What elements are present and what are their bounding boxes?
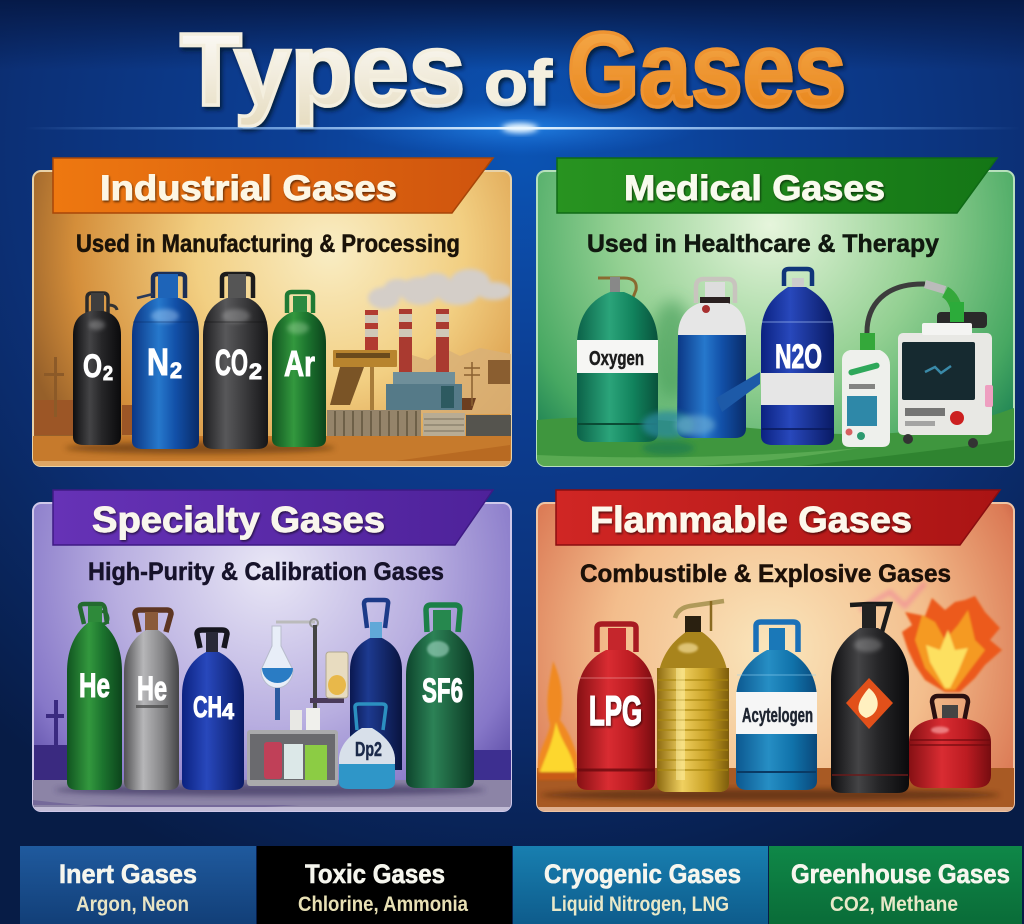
ground — [33, 780, 511, 811]
ground — [537, 408, 1014, 466]
title — [180, 11, 846, 129]
subtitle: industrial: Used in Manufacturing & Processing — [76, 230, 460, 258]
pink scribble — [860, 583, 925, 610]
cylinder He green: He — [79, 667, 110, 705]
cylinder black with hazard — [831, 604, 909, 793]
cylinder N2: 2 — [170, 358, 182, 383]
tile: cryogenic gases — [513, 846, 768, 924]
cylinder He silver — [124, 610, 179, 790]
platform — [330, 367, 364, 405]
title: Gases — [567, 11, 846, 129]
smoke — [368, 269, 512, 309]
patient monitor — [898, 302, 993, 448]
cylinder Acytelogen — [736, 622, 817, 790]
subtitle: medical: Used in Healthcare & Therapy — [587, 230, 939, 258]
tile: greenhouse gases: CO2, Methane — [830, 893, 958, 916]
utility pole — [464, 362, 480, 406]
subtitle: flammable: Combustible & Explosive Gases — [580, 560, 951, 588]
heading ribbon: specialty — [53, 490, 493, 545]
cylinder white-topped blue — [677, 279, 746, 438]
heading ribbon: flammable — [556, 490, 1000, 545]
heading ribbon: flammable: Flammable Gases — [590, 499, 912, 540]
big flame — [902, 596, 1002, 692]
cylinder LPG — [577, 624, 655, 790]
panel: flammable gases — [537, 503, 1014, 811]
cylinder CO2: 2 — [249, 359, 262, 384]
handheld device and hose — [842, 284, 958, 447]
lab apparatus — [247, 619, 348, 786]
tile: cryogenic gases: Cryogenic Gases — [544, 859, 741, 889]
plant — [393, 372, 455, 385]
cylinder CO2 — [203, 274, 268, 449]
cylinder SF6: SF6 — [422, 672, 463, 710]
cylinder LPG: LPG — [589, 687, 642, 734]
title: Types — [180, 12, 465, 127]
cylinder CH4: 4 — [222, 699, 235, 724]
tile: greenhouse gases — [769, 846, 1022, 924]
cylinder Oxygen: Oxygen — [589, 348, 644, 370]
subtitle: specialty: High-Purity & Calibration Gases — [88, 558, 444, 586]
title: of — [484, 47, 553, 119]
tile: toxic gases — [257, 846, 512, 924]
tile: inert gases: Argon, Neon — [76, 893, 189, 916]
cylinder Ar: Ar — [284, 343, 315, 384]
heading ribbon: medical: Medical Gases — [624, 169, 885, 208]
cylinder O2: 2 — [103, 363, 113, 385]
left flame — [538, 661, 577, 780]
cylinder N2O — [761, 269, 834, 445]
heading ribbon: medical — [557, 158, 997, 213]
panel: industrial gases — [33, 171, 512, 466]
panel: specialty gases — [33, 503, 511, 811]
cylinder O2 — [73, 293, 121, 445]
cylinder He green — [67, 604, 122, 790]
cylinder Acytelogen: Acytelogen — [742, 705, 813, 727]
heading ribbon: industrial — [53, 158, 493, 213]
factory scene — [34, 269, 512, 437]
cylinder Oxygen — [577, 277, 658, 442]
skyline — [34, 745, 67, 780]
hose spray between cylinders — [642, 372, 760, 455]
glowing divider — [25, 100, 1020, 156]
cylinder N2O: N2O — [775, 338, 822, 376]
cylinder navy — [350, 600, 402, 770]
mist — [650, 300, 694, 400]
cylinder N2: N — [147, 342, 169, 384]
tile: inert gases — [20, 846, 256, 924]
cylinder CH4 — [182, 630, 244, 790]
tile: cryogenic gases: Liquid Nitrogen, LNG — [551, 893, 729, 916]
cylinder N2 — [132, 274, 199, 449]
fence — [327, 410, 421, 437]
panel: medical gases — [537, 171, 1014, 466]
cylinder SF6 — [406, 605, 474, 788]
tile: inert gases: Inert Gases — [59, 859, 197, 889]
cylinder He silver: He — [137, 670, 167, 708]
cylinder Ar — [272, 292, 326, 447]
ground — [537, 768, 1014, 811]
heading ribbon: industrial: Industrial Gases — [100, 169, 397, 208]
cylinder O2: O — [83, 348, 102, 384]
small red tank — [909, 696, 991, 788]
chimneys — [365, 310, 378, 354]
ground — [33, 436, 511, 466]
cylinder small blue — [339, 704, 395, 789]
cylinder gold striped — [657, 601, 729, 792]
bottom band — [20, 846, 1022, 924]
tile: toxic gases: Chlorine, Ammonia — [298, 893, 468, 916]
cylinder small blue: Dp2 — [355, 739, 382, 761]
cylinder CH4: CH — [193, 691, 222, 724]
heading ribbon: specialty: Specialty Gases — [92, 499, 385, 540]
tile: toxic gases: Toxic Gases — [305, 859, 445, 889]
cylinder CO2: CO — [215, 342, 248, 383]
